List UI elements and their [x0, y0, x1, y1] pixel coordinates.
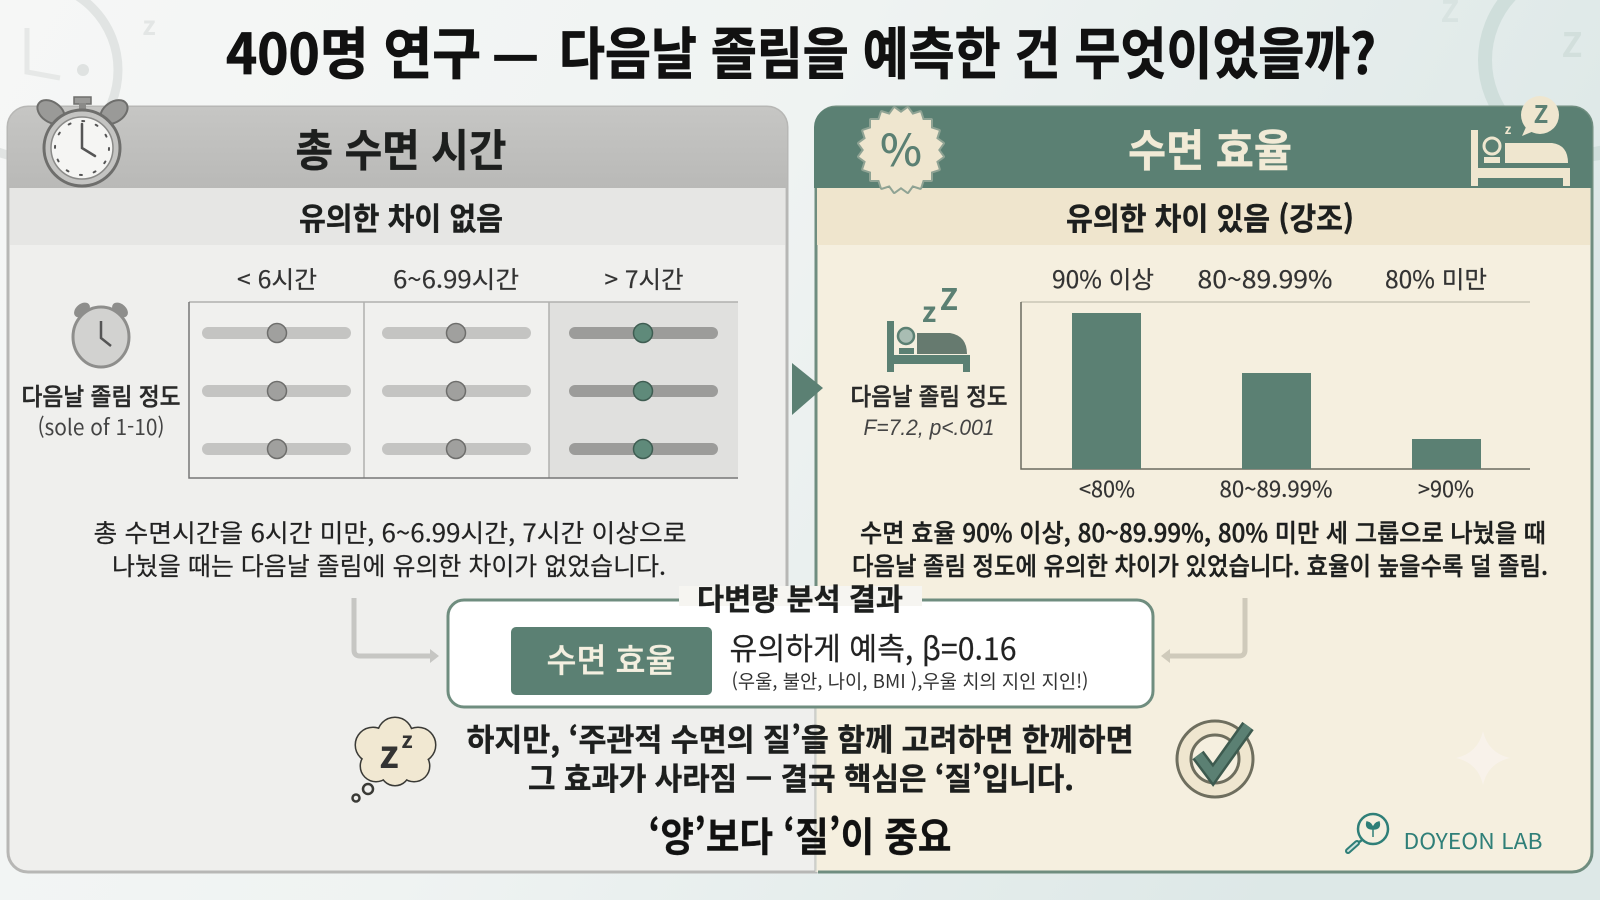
- y-axis label: (sole of 1-10): [38, 410, 164, 442]
- logo: Doyeon Lab: DOYEON LAB: [1404, 824, 1542, 856]
- x-axis labels: >90%: [1418, 472, 1474, 504]
- icon: sparkle: [1456, 731, 1510, 785]
- sliders: over 7 hours: [569, 324, 718, 458]
- conclusion text: 그 효과가 사라짐 — 결국 핵심은 ‘질’입니다.: [528, 754, 1074, 799]
- slider chart: [189, 302, 738, 478]
- icon: bed with speech bubble: z: [1505, 119, 1512, 138]
- column labels: [1052, 260, 1487, 295]
- icon: sleeping person in bed: [887, 275, 970, 372]
- key message: ‘양’보다 ‘질’이 중요: [648, 805, 952, 863]
- column labels: > 7시간: [604, 260, 684, 295]
- panel: total sleep time: [8, 95, 816, 872]
- bar: low efficiency: [1412, 439, 1481, 469]
- icon: percent badge: %: [880, 115, 922, 179]
- y-axis label: [850, 377, 1008, 440]
- column labels: [237, 260, 684, 295]
- icon: sleeping person in bed: Z: [940, 275, 958, 319]
- heading: sleep efficiency: 수면 효율: [1128, 115, 1292, 179]
- sliders: under 6 hours: [202, 324, 351, 458]
- description text: [852, 514, 1548, 583]
- title: [226, 10, 1376, 91]
- icon: alarm clock large: [33, 95, 132, 186]
- icon: sleeping person in bed: z: [922, 291, 936, 331]
- sleep efficiency badge: 수면 효율: [546, 634, 676, 682]
- x-axis labels: 80~89.99%: [1220, 472, 1332, 504]
- panel header: [814, 107, 1592, 188]
- panel header: [8, 107, 787, 188]
- icon: check mark medal: [1177, 721, 1253, 797]
- icon: bed with speech bubble: [1471, 95, 1570, 186]
- subheading: significant difference: 유의한 차이 있음 (강조): [1066, 194, 1354, 239]
- sub-header band: [817, 188, 1590, 245]
- y-axis label: 다음날 졸림 정도: [22, 377, 180, 412]
- description text: 나눴을 때는 다음날 졸림에 유의한 차이가 없었습니다.: [112, 547, 666, 583]
- sleep efficiency badge: [511, 627, 712, 695]
- covariates note: (우울, 불안, 나이, BMI ),우울 치의 지인 지인!): [732, 667, 1088, 694]
- icon: thought cloud: z: [379, 724, 399, 779]
- seam between panels: [815, 707, 817, 872]
- x-axis labels: <80%: [1079, 472, 1135, 504]
- panel outline: [816, 107, 1592, 872]
- icon: percent badge: [859, 108, 943, 192]
- bar: high efficiency: [1072, 313, 1141, 469]
- arrow: panel to panel: [792, 363, 823, 415]
- connector arrow: right: [1161, 598, 1245, 663]
- subheading: no significant difference: 유의한 차이 없음: [299, 194, 503, 239]
- bar chart: [1021, 302, 1530, 469]
- column labels: 80% 미만: [1385, 260, 1487, 295]
- result text: 유의하게 예측, β=0.16: [730, 624, 1016, 669]
- conclusion text: [466, 715, 1134, 799]
- heading: total sleep time: 총 수면 시간: [296, 115, 506, 179]
- icon: thought cloud: z: [401, 723, 413, 755]
- result box title: 다변량 분석 결과: [697, 575, 903, 619]
- y-axis label: [22, 377, 180, 442]
- column labels: < 6시간: [237, 260, 317, 295]
- result box: [448, 575, 1153, 707]
- description text: [94, 514, 686, 583]
- background: z: [142, 6, 156, 43]
- icon: bed with speech bubble: Z: [1534, 95, 1548, 130]
- sub-header band: [10, 188, 785, 245]
- y-axis label: 다음날 졸림 정도: [850, 377, 1008, 412]
- background: Z: [1562, 18, 1582, 67]
- description text: 수면 효율 90% 이상, 80~89.99%, 80% 미만 세 그룹으로 나눴을 때: [860, 514, 1546, 550]
- panel: sleep efficiency: [814, 95, 1592, 872]
- description text: 다음날 졸림 정도에 유의한 차이가 있었습니다. 효율이 높을수록 덜 졸림.: [852, 547, 1548, 583]
- icon: alarm clock small: [71, 300, 131, 367]
- column labels: 90% 이상: [1052, 260, 1154, 295]
- x-axis labels: [1079, 472, 1474, 504]
- title: —: [492, 10, 539, 91]
- y-axis label: F=7.2, p<.001: [864, 415, 994, 440]
- title: 다음날 졸림을 예측한 건 무엇이었을까?: [559, 10, 1376, 91]
- logo: Doyeon Lab: [1348, 814, 1542, 856]
- conclusion text: 하지만, ‘주관적 수면의 질’을 함께 고려하면 한께하면: [466, 715, 1134, 760]
- icon: thought cloud: [352, 718, 435, 802]
- connector arrow: left: [354, 598, 439, 663]
- bar: mid efficiency: [1242, 373, 1311, 469]
- description text: 총 수면시간을 6시간 미만, 6~6.99시간, 7시간 이상으로: [94, 514, 686, 550]
- column labels: 80~89.99%: [1198, 260, 1332, 295]
- sliders: 6 to 6.99 hours: [382, 324, 531, 458]
- title: 400명 연구: [226, 10, 481, 91]
- column labels: 6~6.99시간: [393, 260, 519, 295]
